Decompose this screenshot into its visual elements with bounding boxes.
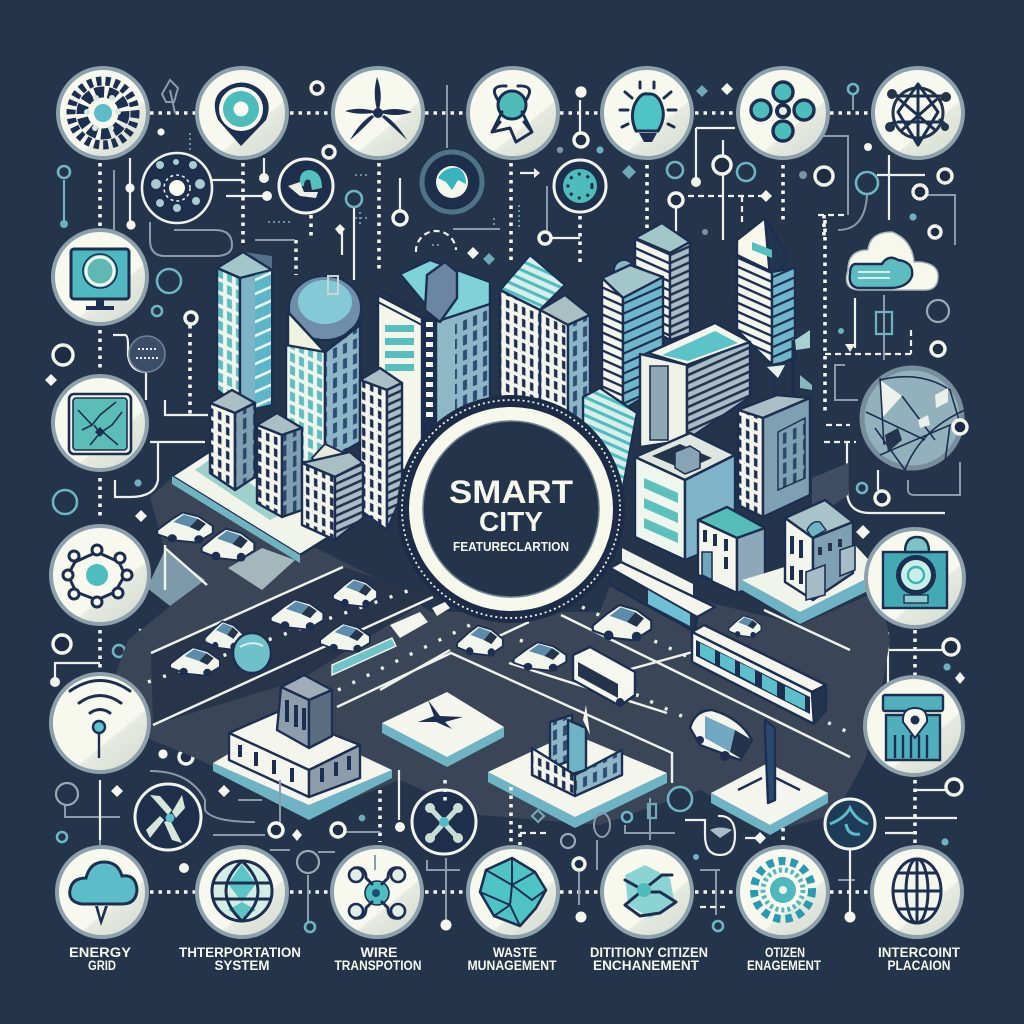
back striped tower <box>635 223 690 340</box>
secondary dark circles <box>129 152 967 854</box>
label: intercoint placaion <box>878 945 961 973</box>
small block B <box>257 413 302 517</box>
node hub <box>142 153 212 223</box>
teal low block <box>583 388 637 503</box>
car <box>170 647 220 677</box>
label: waste management: WASTE <box>493 945 537 960</box>
isometric platforms <box>213 675 828 835</box>
platform 4 with tower <box>711 720 828 835</box>
icon: teal globe <box>197 847 287 937</box>
label: intercoint placaion: INTERCOINT <box>878 945 961 960</box>
circuit lines: upper network <box>45 80 965 764</box>
icon: monitor <box>53 230 147 324</box>
parking lot <box>147 512 295 606</box>
grey globe <box>862 368 965 470</box>
turbine small <box>825 799 875 849</box>
car <box>205 621 243 651</box>
teal gear <box>554 160 606 212</box>
fan <box>135 784 201 850</box>
icon: secured fingerprint <box>866 529 964 627</box>
label: wire transportion: WIRE <box>360 945 398 960</box>
icon: pin on building <box>865 677 963 775</box>
icon: light bulb <box>602 68 692 158</box>
left column of icon circles <box>51 230 149 772</box>
title: city: CITY <box>479 506 543 537</box>
bottom labels <box>69 945 961 973</box>
icon: four nodes <box>738 68 828 158</box>
label: citizen enagement <box>747 945 822 973</box>
label: wire transportion <box>334 945 422 973</box>
icon: drone frame <box>332 847 422 937</box>
label: transportation system: THTERPORTATION <box>179 945 301 960</box>
electric car <box>690 710 752 761</box>
small nodes <box>45 80 965 764</box>
tower 2 <box>286 276 361 462</box>
label: transportation system <box>179 945 301 973</box>
small block D <box>360 368 402 530</box>
label: waste management: MUNAGEMENT <box>468 958 557 973</box>
base platform left <box>172 450 340 563</box>
top row of icon circles <box>58 68 963 158</box>
car centre <box>457 625 503 657</box>
city skyline: left cluster <box>172 252 490 563</box>
house L <box>785 500 855 600</box>
grey block J <box>738 395 810 517</box>
label: transportation system: SYSTEM <box>214 958 270 973</box>
label: citizen engagement <box>590 945 708 973</box>
title: smart: SMART <box>449 474 573 510</box>
icon: teal snowflake <box>738 847 828 937</box>
icon: signal rocket <box>468 68 558 158</box>
dark road band <box>151 567 433 725</box>
icon: snowflake network <box>58 68 148 158</box>
right platform <box>742 545 880 624</box>
right column of icon circles <box>865 529 964 775</box>
striped tower <box>602 260 663 410</box>
label: energy grid <box>69 945 131 973</box>
teal plate with vehicle <box>320 623 396 675</box>
platform 2 with origami <box>382 692 504 767</box>
car right <box>593 605 651 642</box>
teal sphere <box>233 633 271 673</box>
icon: cloud <box>57 847 147 937</box>
road vehicles and street objects <box>147 512 826 761</box>
label: citizen enagement: ENAGEMENT <box>747 958 822 973</box>
mid tower pair <box>500 255 590 440</box>
label: intercoint placaion: PLACAION <box>888 958 950 973</box>
ground: street plane <box>110 478 890 830</box>
label: waste management <box>468 945 557 973</box>
car <box>514 642 566 672</box>
small block C <box>302 444 363 540</box>
icon: wifi <box>51 674 149 772</box>
label: wire transportion: TRANSPOTION <box>334 958 422 973</box>
spire tower <box>737 218 795 365</box>
lower circuit lines <box>56 770 962 932</box>
globe node <box>953 420 967 434</box>
chevrons <box>390 602 450 638</box>
icon: wind turbine <box>333 68 423 158</box>
icon: teal node mesh <box>602 847 692 937</box>
subtitle: FEATURECLARTION <box>453 539 569 554</box>
cars left road <box>333 578 377 608</box>
bus 1 <box>610 562 715 632</box>
node chip <box>129 336 165 372</box>
rooftop building I <box>622 433 735 600</box>
bottom row of icon circles <box>57 847 962 937</box>
car <box>271 599 323 631</box>
tower 1 <box>217 252 272 412</box>
icon: hex network <box>51 526 149 624</box>
dark annex <box>812 463 848 520</box>
icon: network globe <box>873 68 963 158</box>
small blue car <box>729 616 761 638</box>
label: citizen engagement: DITITIONY CITIZEN <box>590 945 708 960</box>
label: energy grid: GRID <box>88 958 116 973</box>
road markings <box>148 567 850 783</box>
label: citizen engagement: ENCHANEMENT <box>593 958 700 973</box>
label: energy grid: ENERGY <box>69 945 131 960</box>
data node <box>422 152 482 212</box>
cloud node <box>846 232 938 290</box>
platform 1 with civic building <box>213 675 392 820</box>
platform 3 with spire <box>488 705 667 828</box>
drone <box>412 790 476 854</box>
flags <box>767 330 812 400</box>
teal-roof house K <box>698 507 765 593</box>
icon: cracked tile <box>53 376 147 470</box>
van <box>573 647 635 706</box>
tower 3 <box>378 260 490 470</box>
central badge <box>397 395 625 623</box>
wide building with rooftop panel <box>640 323 750 447</box>
icon: map pin <box>197 68 287 158</box>
city skyline: centre and right towers <box>500 218 880 624</box>
teal device <box>279 159 333 213</box>
icon: polygon mesh <box>468 847 558 937</box>
small block A <box>210 390 255 490</box>
label: citizen enagement: OTIZEN <box>765 945 805 960</box>
icon: wire globe <box>872 847 962 937</box>
bus 2 <box>692 625 826 724</box>
